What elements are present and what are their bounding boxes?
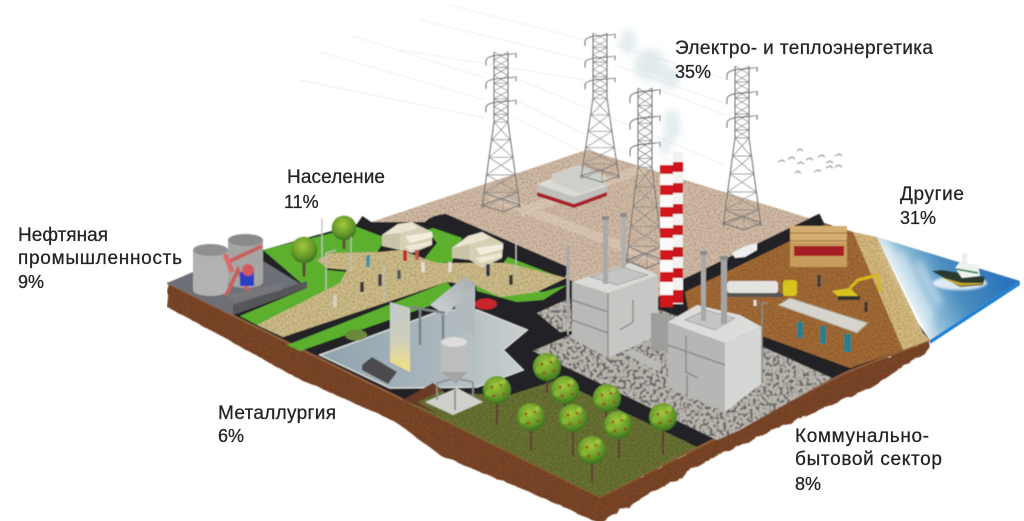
label: power and heat: Электро- и теплоэнергетика [675, 38, 933, 59]
power line wires [300, 5, 730, 175]
small building on sand [537, 165, 607, 208]
label: metallurgy: Металлургия [218, 403, 336, 424]
cars [345, 243, 757, 340]
label: metallurgy [218, 403, 336, 446]
label: power and heat: 35% [675, 62, 711, 82]
label: metallurgy: 6% [218, 426, 244, 446]
label: oil industry: Нефтяная [18, 225, 108, 246]
oil tanks [193, 234, 263, 296]
label: other: 31% [900, 208, 936, 228]
label: power and heat [675, 38, 933, 82]
green lawns [240, 227, 567, 351]
houses [382, 222, 503, 268]
gas station canopy [778, 298, 868, 352]
cobblestone yard [533, 298, 832, 440]
label: population: 11% [284, 192, 319, 212]
label: oil industry: промышленность [18, 248, 182, 269]
ground: dirt zone [685, 224, 903, 368]
paved walkway [257, 250, 566, 337]
label: municipal sector: Коммунально- [795, 426, 929, 447]
orchard trees [483, 353, 677, 483]
metallurgy equipment [362, 277, 476, 384]
ship [932, 253, 987, 290]
water [877, 237, 1020, 344]
label: other: Другие [900, 184, 964, 205]
concrete yard [320, 310, 527, 388]
chimneys [660, 152, 683, 307]
power plant block 1 [568, 213, 658, 358]
label: other [900, 184, 964, 228]
connecting duct and stairs [623, 313, 669, 372]
transmission tower 4 [723, 66, 761, 230]
orchard field [403, 380, 697, 497]
warehouse [790, 226, 847, 267]
sand beach strip [853, 232, 930, 350]
transmission tower 3 [626, 88, 664, 268]
transmission tower 2 [581, 33, 619, 182]
ground base [167, 150, 930, 497]
label: municipal sector: 8% [795, 474, 821, 494]
soil block sides [167, 283, 930, 521]
smoke [620, 30, 680, 155]
workers [755, 275, 866, 312]
block top rim [167, 283, 930, 497]
fuel tanker truck [727, 280, 797, 297]
panel: oil industry platform [167, 234, 307, 315]
power plant block 2 [668, 251, 768, 412]
tank on stand [425, 337, 483, 415]
people [335, 250, 511, 307]
label: oil industry [18, 225, 182, 292]
excavator [832, 275, 880, 300]
label: municipal sector: бытовой сектор [795, 449, 942, 470]
label: population [284, 167, 385, 212]
label: municipal sector [795, 426, 942, 494]
birds [778, 149, 842, 173]
lawn trees [291, 216, 356, 277]
label: oil industry: 9% [18, 272, 44, 292]
label: population: Население [287, 167, 385, 188]
street lamps [322, 218, 568, 335]
roads [359, 219, 822, 285]
oil pump jack [225, 246, 282, 302]
ground: sand zone [372, 150, 822, 310]
transmission tower 1 [482, 52, 520, 212]
